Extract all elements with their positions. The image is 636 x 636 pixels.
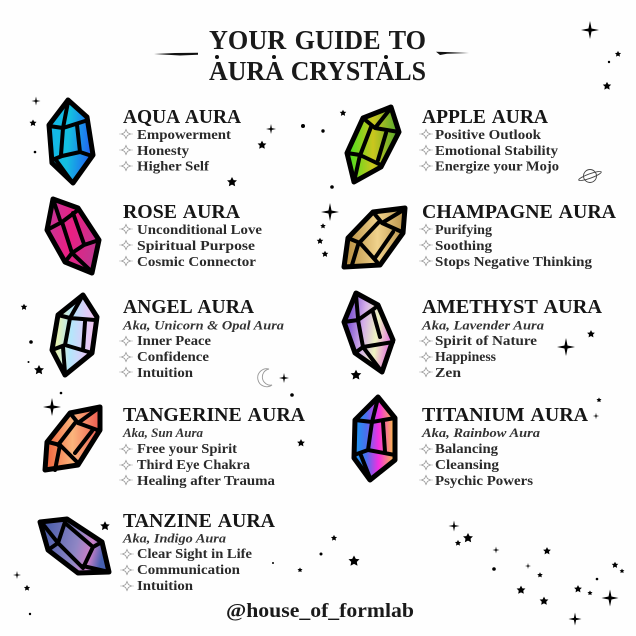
crystal: tangerine (45, 407, 100, 470)
crystal: apple (347, 107, 399, 182)
text block: tanzine aura: TANZINE AURA (123, 511, 275, 532)
text block: apple aura: Positive Outlook (435, 127, 541, 142)
crystal: angel (52, 295, 97, 375)
text block: aqua aura (119, 107, 241, 174)
text block: tangerine aura: Free your Spirit (137, 441, 237, 456)
text block: rose aura: Cosmic Connector (137, 254, 256, 269)
text block: titanium aura: TITANIUM AURA (422, 405, 588, 426)
text block: angel aura: ANGEL AURA (123, 297, 254, 318)
crystal: tanzine (40, 519, 109, 573)
text block: amethyst aura: Happiness (435, 349, 496, 364)
text block: titanium aura: Balancing (435, 441, 498, 456)
text block: aqua aura: Higher Self (137, 158, 210, 174)
title: YOUR GUIDE TO (209, 25, 426, 55)
crystal: titanium (354, 397, 395, 480)
text block: tangerine aura: Third Eye Chakra (137, 457, 250, 472)
crystal: rose (47, 199, 99, 273)
crystal: champagne (344, 208, 405, 267)
text block: rose aura: Unconditional Love (137, 222, 262, 237)
text block: angel aura: Intuition (137, 365, 193, 380)
text block: tanzine aura: Clear Sight in Life (137, 546, 252, 561)
text block: tanzine aura: Intuition (137, 578, 193, 593)
text block: amethyst aura: Zen (435, 365, 461, 380)
title: AURA CRYSTALS (209, 56, 426, 86)
text block: tangerine aura (119, 405, 305, 488)
text block: rose aura: ROSE AURA (123, 202, 240, 223)
text block: tanzine aura: Aka, Indigo Aura (122, 530, 227, 546)
text block: rose aura: Spiritual Purpose (137, 238, 255, 253)
text block: titanium aura (419, 405, 588, 488)
text block: aqua aura: Empowerment (137, 127, 232, 142)
text block: titanium aura: Aka, Rainbow Aura (421, 425, 541, 440)
text block: apple aura: Emotional Stability (435, 143, 558, 158)
icon: planet (578, 170, 602, 182)
text block: champagne aura: Soothing (435, 238, 492, 253)
text block: aqua aura: AQUA AURA (123, 107, 241, 128)
crystal: amethyst (344, 293, 393, 372)
text block: champagne aura (419, 202, 616, 269)
text block: angel aura (119, 297, 285, 380)
text block: tangerine aura: Healing after Trauma (137, 473, 275, 488)
text block: titanium aura: Cleansing (435, 457, 499, 472)
text block: tangerine aura: TANGERINE AURA (123, 405, 305, 426)
text block: titanium aura: Psychic Powers (435, 473, 533, 488)
handle: @house_of_formlab (226, 600, 414, 622)
text block: angel aura: Aka, Unicorn & Opal Aura (122, 318, 285, 332)
text block: apple aura: APPLE AURA (422, 107, 548, 128)
text block: aqua aura: Honesty (137, 143, 189, 158)
text block: amethyst aura: Aka, Lavender Aura (421, 318, 545, 332)
text block: tanzine aura: Communication (137, 562, 240, 577)
icon: moon (258, 369, 272, 387)
text block: amethyst aura (419, 297, 602, 380)
text block: amethyst aura: Spirit of Nature (435, 333, 537, 348)
text block: tangerine aura: Aka, Sun Aura (122, 425, 203, 440)
text block: apple aura: Energize your Mojo (435, 158, 559, 174)
text block: champagne aura: CHAMPAGNE AURA (422, 202, 616, 223)
text block: angel aura: Confidence (137, 349, 209, 364)
text block: tanzine aura (120, 511, 275, 593)
title (154, 25, 469, 86)
text block: rose aura (119, 202, 262, 269)
text block: champagne aura: Purifying (435, 222, 492, 237)
text block: apple aura (419, 107, 559, 174)
text block: champagne aura: Stops Negative Thinking (435, 254, 592, 269)
text block: amethyst aura: AMETHYST AURA (422, 297, 602, 318)
text block: angel aura: Inner Peace (137, 333, 211, 348)
crystal: aqua (49, 100, 93, 183)
